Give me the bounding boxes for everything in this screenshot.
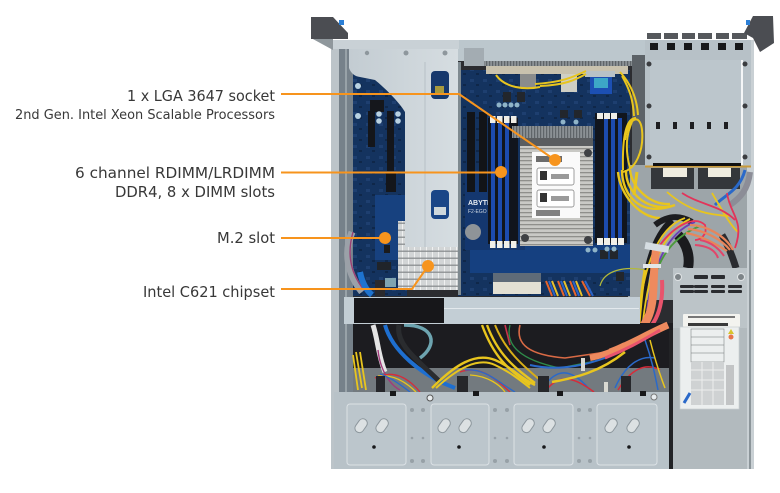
DIMM slots right — [595, 113, 627, 245]
HDD cage — [645, 33, 751, 168]
power supply unit — [673, 268, 747, 469]
brand text on board: ABYTE — [468, 200, 492, 207]
callout: M.2 slot — [217, 229, 391, 247]
panel spacer rivets — [410, 408, 592, 463]
bracket window bottom — [431, 190, 449, 219]
blue cable — [360, 272, 372, 295]
yellow cables to CPU power — [496, 71, 675, 218]
ribbon cable — [348, 232, 362, 292]
PSU vents — [680, 275, 742, 293]
M.2 connector — [377, 262, 391, 270]
main motherboard — [458, 70, 645, 296]
lower left cables — [353, 325, 668, 392]
PCIe slots — [467, 112, 487, 192]
plate tabs — [390, 391, 646, 396]
cage screws — [646, 62, 748, 160]
left mounting ear — [311, 17, 348, 50]
DIMM slots left — [488, 116, 518, 248]
battery — [465, 224, 481, 240]
bar foam — [354, 298, 444, 323]
left riser board — [348, 70, 407, 296]
SATA cables right — [715, 170, 750, 205]
bracket window top — [431, 71, 449, 99]
fan panels — [347, 404, 657, 465]
PSU barcode label — [683, 314, 740, 327]
green and yellow sensor wire — [600, 269, 645, 286]
capacitors — [355, 83, 401, 124]
fan plate — [334, 391, 669, 469]
colored fan wires on board — [546, 281, 593, 296]
main motherboard: F2-EGO — [468, 209, 487, 215]
right mounting ear — [744, 16, 774, 52]
callout: chipset: Intel C621 chipset — [143, 283, 275, 301]
yellow power bundle — [482, 325, 530, 385]
riser slots — [368, 111, 396, 192]
CPU label — [532, 152, 580, 218]
PSU spec label — [680, 327, 739, 409]
callout: CPU socket: 2nd Gen. Intel Xeon Scalable Processors — [15, 108, 275, 123]
rear fan headers row — [493, 282, 541, 294]
cable ties lower — [581, 358, 585, 371]
cable tie — [644, 242, 669, 253]
VGA connector — [590, 76, 612, 94]
callout: CPU socket — [15, 87, 561, 166]
callout: chipset — [143, 260, 434, 301]
drive connectors — [651, 168, 740, 189]
right chassis wall — [747, 40, 754, 469]
panel keyholes — [353, 417, 641, 434]
green, orange and red wires — [509, 325, 600, 368]
CPU heatsink — [512, 126, 593, 246]
callout: memory: DDR4, 8 x DIMM slots — [115, 183, 275, 201]
callout: M.2 slot: M.2 slot — [217, 229, 275, 247]
fan connectors — [376, 376, 631, 392]
fan wires — [375, 374, 420, 392]
VRM components — [503, 92, 624, 281]
power supply wiring harness — [590, 192, 738, 385]
lower bay — [353, 323, 673, 393]
callout text: socket: 1 x LGA 3647 socket — [127, 87, 275, 105]
rear edge strip — [333, 40, 459, 49]
callout text: memory: 6 channel RDIMM/LRDIMM — [75, 164, 275, 182]
floor behind cables — [628, 165, 747, 300]
black cross bar — [344, 297, 640, 324]
server chassis — [311, 16, 774, 469]
cage top tabs — [647, 33, 747, 39]
chipset heatsink — [398, 221, 458, 290]
chassis interior — [331, 40, 754, 469]
left chassis wall — [331, 40, 353, 469]
riser bracket — [349, 42, 461, 295]
rear top rail with IO — [458, 40, 645, 165]
orange and pink cable bundle — [590, 250, 656, 358]
cage slots — [656, 122, 728, 129]
callout: memory — [75, 164, 507, 201]
